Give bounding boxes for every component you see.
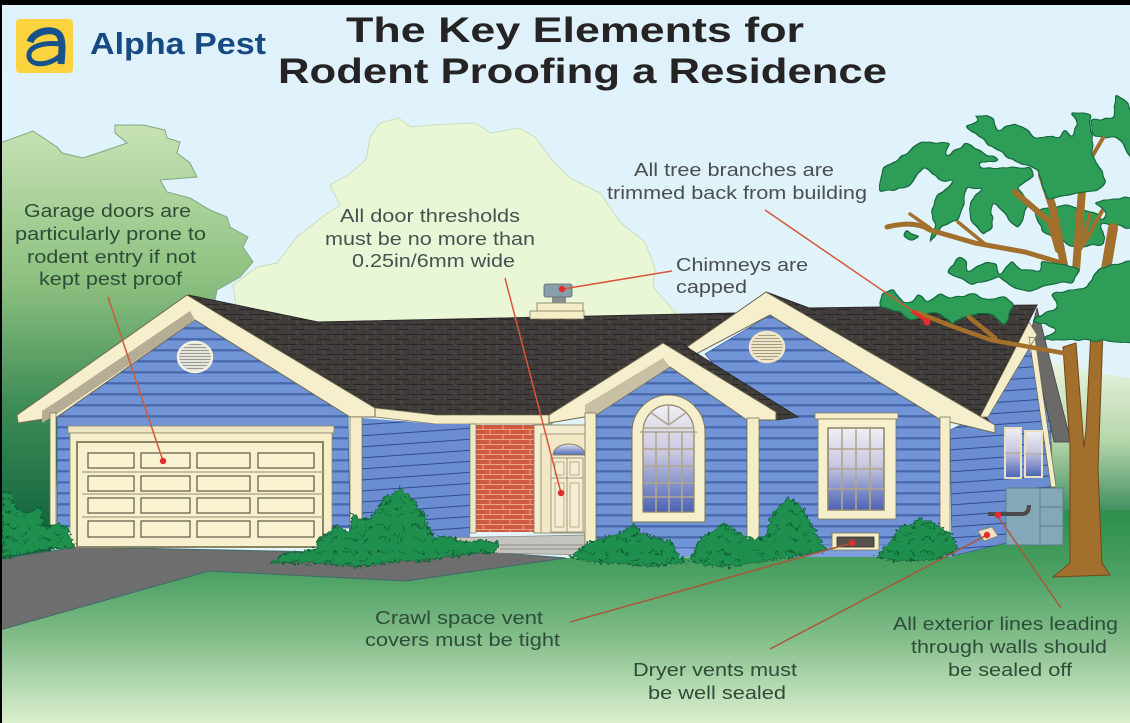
lawn [0, 510, 1130, 723]
post left of brick [470, 424, 476, 533]
tree [878, 93, 1130, 577]
label: garage doors: rodent entry if not [27, 247, 196, 267]
background tree: centre pale [233, 118, 684, 330]
label: chimneys: capped [676, 277, 747, 297]
marker: dryer vent [770, 532, 990, 649]
shrubs [2, 487, 958, 567]
label: crawl space: covers must be tight [365, 630, 560, 650]
title: Rodent Proofing a Residence [278, 52, 887, 91]
driveway [0, 547, 566, 630]
label: crawl space [365, 608, 560, 650]
label: garage doors: Garage doors are [24, 201, 191, 221]
garage gable trim [17, 295, 375, 423]
label: exterior lines [893, 614, 1118, 680]
label: door thresholds: All door thresholds [340, 206, 520, 226]
label: crawl space: Crawl space vent [375, 608, 543, 628]
label: door thresholds: must be no more than [325, 229, 535, 249]
label: exterior lines: be sealed off [948, 660, 1073, 680]
label: garage doors [15, 201, 206, 289]
label: dryer vents [633, 660, 797, 703]
label: tree branches: trimmed back from building [607, 183, 867, 203]
label: chimneys [676, 255, 808, 297]
side gable trim [980, 322, 1056, 487]
tree: back foliage [878, 93, 1130, 248]
exterior pipe [988, 505, 1029, 514]
label: exterior lines: All exterior lines leading [893, 614, 1118, 634]
entry door [534, 425, 586, 533]
arched window [632, 395, 705, 522]
entry gable wall [596, 367, 747, 548]
side windows [1005, 428, 1042, 478]
right gable trim [687, 292, 995, 433]
label: exterior lines: through walls should [911, 637, 1107, 657]
brick wall beside door [476, 425, 534, 532]
right post [940, 417, 950, 541]
right gable wall [705, 315, 941, 545]
tall shrub centre [690, 497, 826, 567]
title [278, 11, 887, 91]
title: The Key Elements for [346, 11, 804, 50]
dryer vent [978, 527, 998, 541]
entry side blue piece [759, 420, 777, 515]
garage gable wall [57, 320, 350, 528]
entry roof [663, 343, 798, 420]
marker: garage door [108, 297, 166, 464]
gable vent garage [178, 342, 212, 372]
shrub far left [2, 492, 75, 558]
label: garage doors: particularly prone to [15, 224, 206, 244]
tree: front foliage [878, 112, 1130, 343]
main roof [188, 295, 735, 415]
label: chimneys: Chimneys are [676, 255, 808, 275]
label: tree branches [607, 160, 867, 203]
callout lines and markers [108, 210, 1061, 649]
right gable roof [766, 292, 1037, 428]
marker: exterior lines [995, 512, 1061, 608]
air conditioning unit [1006, 488, 1063, 545]
middle wall siding [362, 418, 470, 545]
marker: tree branch [765, 210, 931, 326]
entry gable trim [549, 343, 776, 423]
garage door [68, 426, 334, 547]
label: garage doors: kept pest proof [39, 269, 183, 289]
tree: trunk and limbs [887, 138, 1113, 577]
garage posts [50, 413, 362, 527]
label: dryer vents: be well sealed [648, 683, 786, 703]
label: tree branches: All tree branches are [634, 160, 834, 180]
right gable vent [750, 332, 784, 362]
under-eave band [375, 408, 552, 424]
marker: door threshold [505, 278, 564, 496]
shrub by garage [271, 487, 498, 567]
chimney [530, 284, 584, 319]
background tree: right distant [1045, 362, 1130, 530]
logo mark [16, 19, 73, 73]
picture window [815, 413, 898, 519]
side gable rear roof sliver [1030, 308, 1071, 442]
shrub right [875, 518, 958, 561]
entry steps [435, 535, 585, 555]
shrub by entry [570, 525, 685, 566]
marker: chimney [559, 271, 672, 292]
background tree: left pale green [0, 125, 253, 570]
label: door thresholds [325, 206, 535, 271]
marker: crawl vent [570, 540, 855, 622]
logo [16, 19, 266, 73]
house [17, 284, 1071, 557]
label: dryer vents: Dryer vents must [633, 660, 797, 680]
logo wordmark: Alpha Pest [90, 26, 266, 61]
tree: low branch over roof [916, 312, 1063, 353]
label: door thresholds: 0.25in/6mm wide [352, 251, 515, 271]
side wall [950, 343, 1053, 556]
foundation strip [590, 535, 952, 557]
crawl space vent [832, 533, 879, 550]
entry posts [585, 413, 759, 548]
